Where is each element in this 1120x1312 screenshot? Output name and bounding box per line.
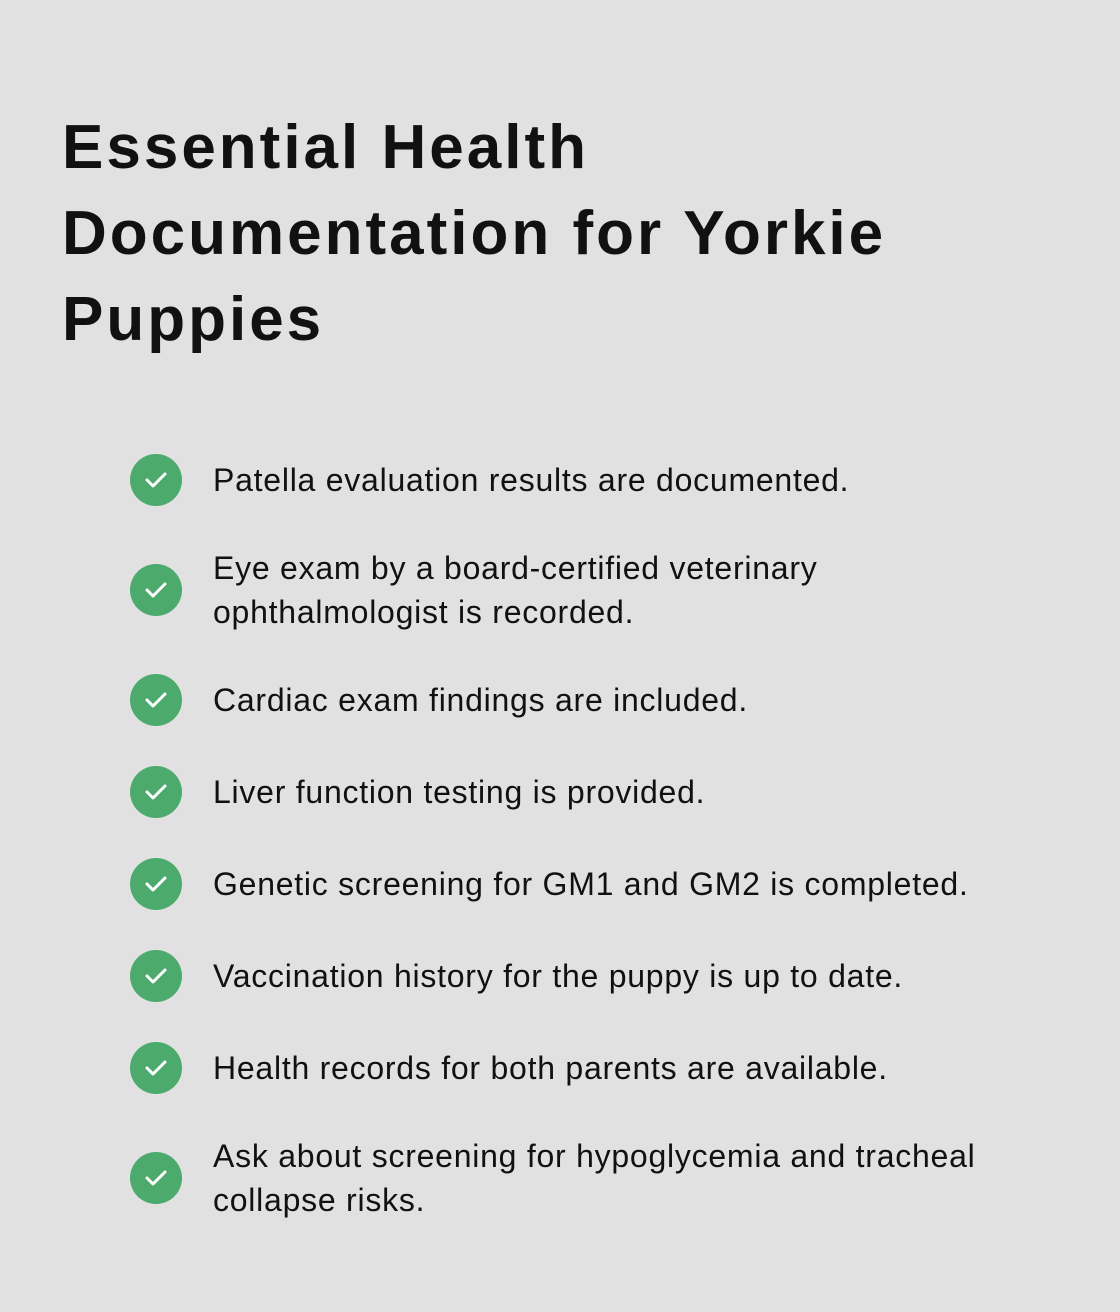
item: cardiac: Cardiac exam findings are included. — [213, 682, 748, 718]
item: hypoglycemia — [130, 1138, 976, 1218]
item: eye exam: Eye exam by a board-certified veterinary — [213, 550, 817, 586]
item: genetic — [130, 858, 969, 910]
item: parents — [130, 1042, 888, 1094]
item: hypoglycemia: Ask about screening for hypoglycemia and tracheal — [213, 1138, 976, 1174]
item: vaccination: Vaccination history for the puppy is up to date. — [213, 958, 903, 994]
item: liver — [130, 766, 705, 818]
item: genetic: Genetic screening for GM1 and GM2 is completed. — [213, 866, 969, 902]
item: eye exam — [130, 550, 817, 630]
title — [62, 113, 886, 354]
item: patella: Patella evaluation results are documented. — [213, 462, 849, 498]
item: parents: Health records for both parents are available. — [213, 1050, 888, 1086]
item: patella — [130, 454, 849, 506]
item: liver: Liver function testing is provided. — [213, 774, 705, 810]
item: eye exam: ophthalmologist is recorded. — [213, 594, 634, 630]
item: vaccination — [130, 950, 903, 1002]
title: Essential Health — [62, 113, 589, 182]
title: Documentation for Yorkie — [62, 199, 886, 268]
title: Puppies — [62, 285, 324, 354]
item: cardiac — [130, 674, 748, 726]
item: hypoglycemia: collapse risks. — [213, 1182, 425, 1218]
